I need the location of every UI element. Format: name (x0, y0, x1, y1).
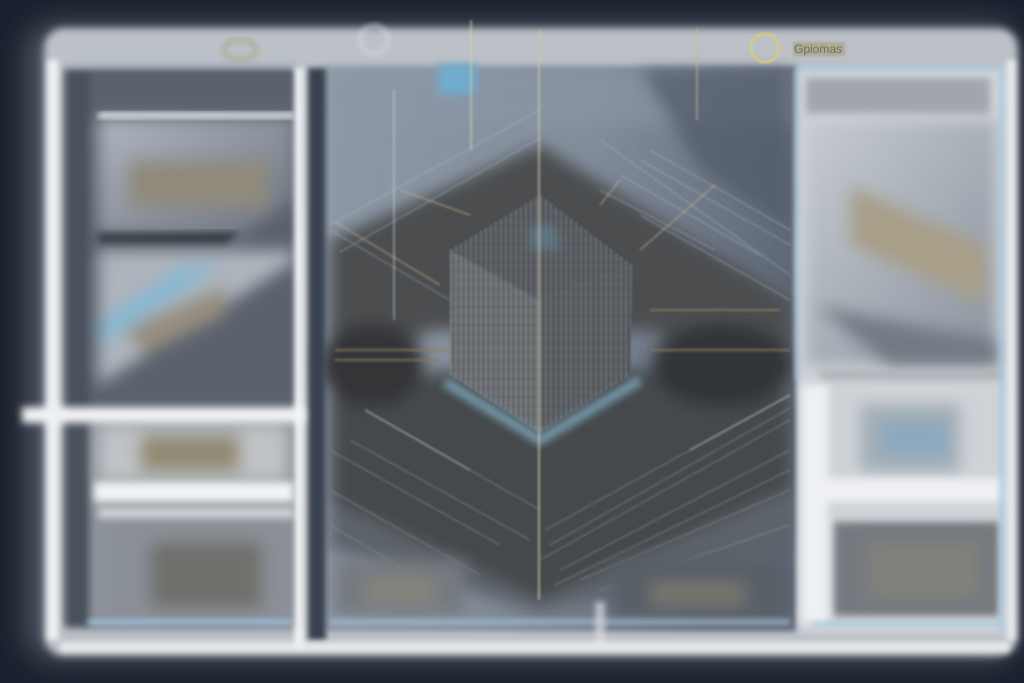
logo text: Gpiomas (794, 42, 842, 56)
right white bands (802, 370, 1004, 623)
right card: large chart (806, 120, 1000, 368)
logo (751, 34, 845, 62)
icon: left ring (224, 40, 256, 60)
header icons and logo (224, 26, 845, 62)
left card: second chart (98, 250, 294, 385)
dark isometric floor (320, 70, 796, 612)
left card: top chart header (98, 112, 294, 119)
centre cube with grid lines (450, 195, 632, 432)
left card: top chart (98, 118, 294, 240)
panel: centre isometric scene (320, 20, 796, 631)
icon: centre ring (360, 26, 388, 54)
left card: dark band (98, 232, 240, 246)
panel: left column (22, 68, 304, 628)
bottom card: centre left (335, 560, 465, 615)
right card: lower tile centre (868, 542, 978, 598)
panel: right column (798, 68, 1006, 633)
blue header patch (438, 64, 476, 94)
left white bands (22, 407, 304, 518)
bright vertical guide lines (394, 20, 697, 600)
right card: lower tile (834, 522, 999, 616)
right card: blue tile (860, 404, 960, 472)
left card: lower tile (108, 522, 286, 618)
dark divider column (308, 68, 326, 640)
right card: header tile (806, 78, 990, 114)
left card: gold tile (98, 424, 288, 482)
cube base glow (445, 225, 640, 440)
isometric line hatching (330, 110, 790, 590)
bottom card: centre right (612, 560, 787, 618)
